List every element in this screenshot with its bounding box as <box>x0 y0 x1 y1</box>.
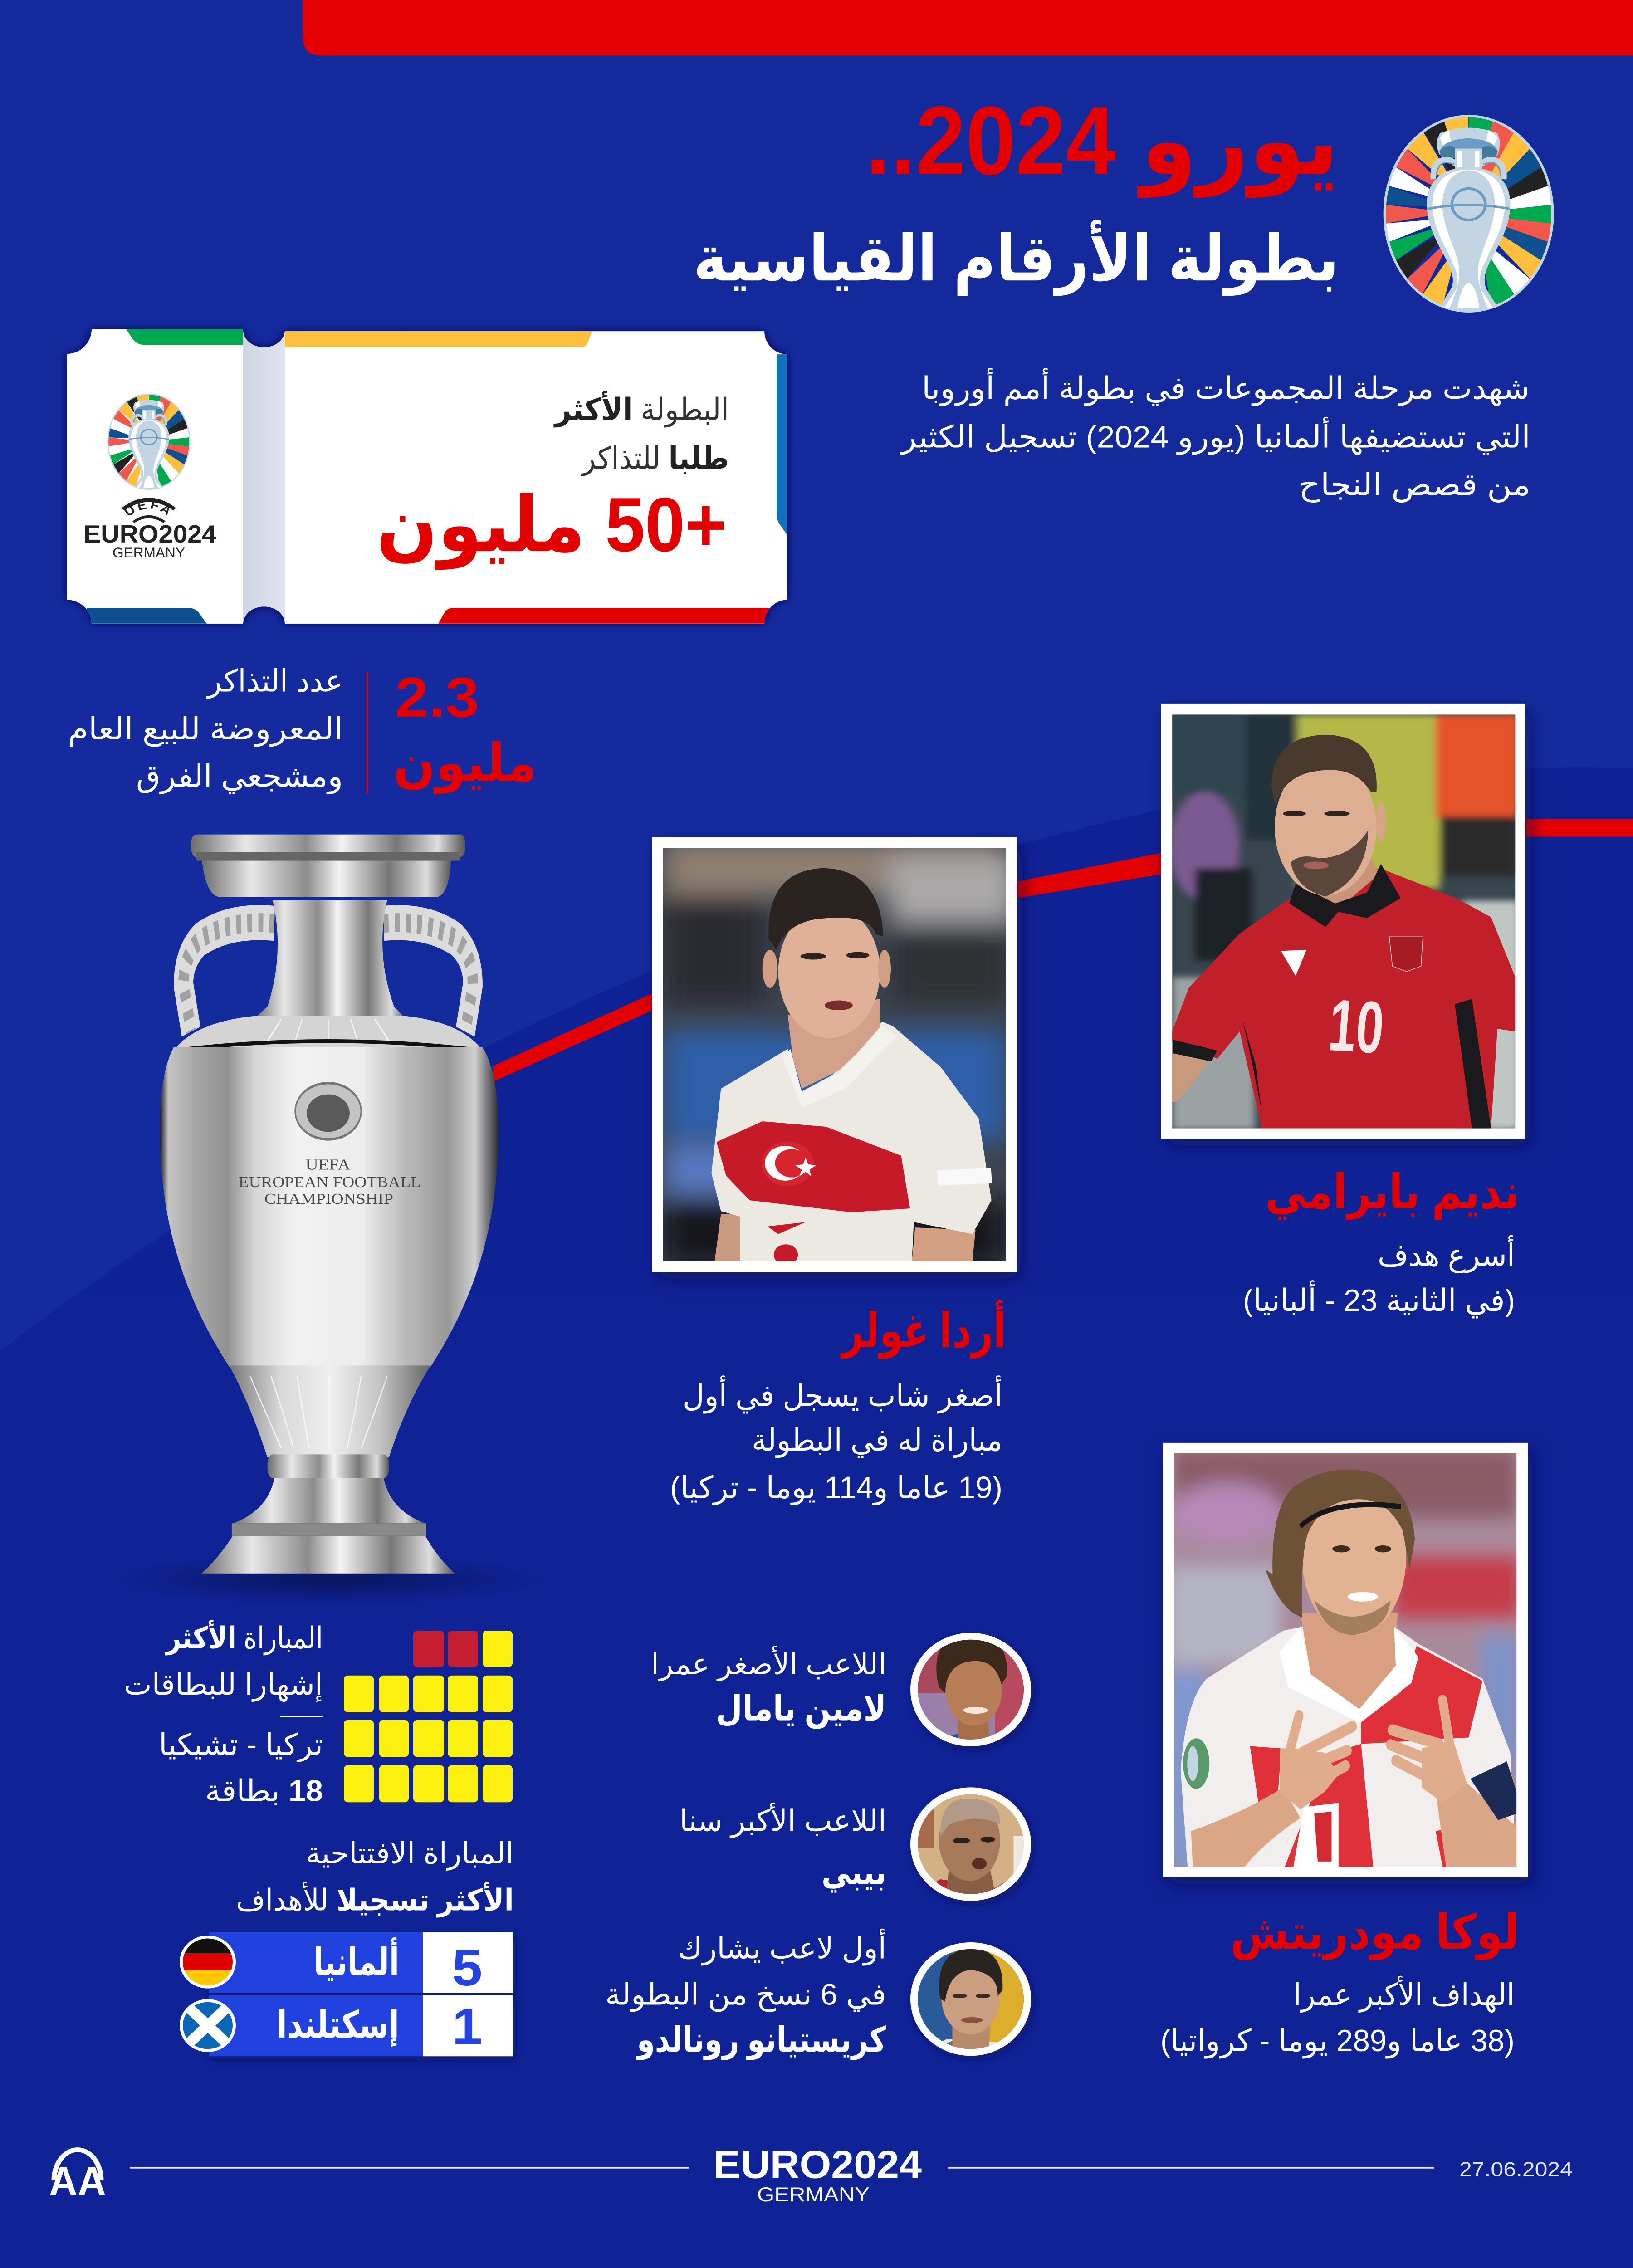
jersey <box>1172 868 1515 1129</box>
chart: card grid <box>344 1631 513 1802</box>
swoosh red connecting line <box>493 819 1633 1082</box>
arm <box>1172 1053 1211 1102</box>
date: 27.06.2024 <box>1459 2158 1573 2180</box>
jersey details <box>1281 950 1306 976</box>
arms <box>1191 1788 1301 1867</box>
head <box>1275 759 1376 895</box>
text: Pepe: اللاعب الأكبر سنا <box>680 1802 886 1838</box>
text: Ronaldo: كريستيانو رونالدو <box>636 2020 887 2060</box>
portrait: Lamine Yamal <box>897 1624 1044 1762</box>
name: Bajrami: (في الثانية 23 - ألبانيا) <box>1243 1280 1515 1319</box>
name: Modric <box>1160 1906 1519 2059</box>
number <box>1293 1803 1339 1867</box>
title <box>693 86 1339 296</box>
text: Pepe <box>680 1802 886 1892</box>
row: Scotland: إسكتلندا <box>277 2004 399 2047</box>
intro paragraph: التي تستضيفها ألمانيا (يورو 2024) تسجيل الكثير <box>900 416 1530 455</box>
stat: 2.3 million: عدد التذاكر <box>206 664 343 699</box>
text: Lamine Yamal: لامين يامال <box>716 1689 886 1729</box>
cards text: المباراة الأكثر <box>165 1620 323 1656</box>
intro paragraph: شهدت مرحلة المجموعات في بطولة أمم أوروبا <box>922 368 1530 406</box>
row: Germany <box>313 1937 482 1996</box>
shirt <box>1181 1627 1516 1867</box>
portrait: Pepe <box>897 1779 1044 1916</box>
shoulder <box>174 1016 483 1051</box>
name: Bajrami: نديم بايرامي <box>1265 1166 1520 1220</box>
footer rule left <box>130 2167 689 2169</box>
panel: ticket <box>67 324 787 627</box>
neck <box>1297 858 1378 904</box>
row: Scotland <box>277 1998 482 2055</box>
name: Guler <box>670 1300 1006 1506</box>
stat: 2.3 million <box>68 664 537 795</box>
red band <box>717 1121 910 1212</box>
body <box>160 1047 499 1367</box>
ticket number: +50 مليون <box>376 482 727 570</box>
name: Modric: لوكا مودريتش <box>1230 1906 1519 1960</box>
handles <box>183 923 274 1031</box>
shirt collar <box>782 1025 896 1108</box>
logo: euro 2024 footer: GERMANY <box>757 2183 870 2206</box>
trophy <box>116 835 542 1605</box>
cards text: تركيا - تشيكيا <box>159 1728 323 1762</box>
shirt <box>711 1022 992 1261</box>
text: Pepe: بيبي <box>821 1853 886 1892</box>
opening match text: الأكثر تسجيلا للأهداف <box>236 1882 514 1918</box>
intro paragraph <box>900 368 1530 503</box>
neck <box>254 900 406 1019</box>
cards text: إشهارا للبطاقات <box>124 1668 323 1702</box>
text: Ronaldo <box>605 1929 887 2060</box>
name: Modric: الهداف الأكبر عمرا <box>1293 1975 1515 2013</box>
flag: Scotland <box>180 1999 236 2052</box>
stat: 2.3 million: ومشجعي الفرق <box>136 759 343 795</box>
ticket wordmark: UEFA <box>122 498 176 519</box>
name: Guler: مباراة له في البطولة <box>752 1423 1002 1458</box>
name: Guler: أصغر شاب يسجل في أول <box>683 1375 1002 1414</box>
name: Bajrami: أسرع هدف <box>1378 1235 1515 1273</box>
opening match text <box>236 1837 514 1918</box>
portrait: Ronaldo <box>897 1932 1044 2071</box>
stat: 2.3 million: المعروضة للبيع العام <box>68 712 343 747</box>
row: Germany: ألمانيا <box>313 1937 399 1983</box>
arms <box>714 1214 742 1261</box>
trophy inscription: UEFA <box>306 1156 351 1173</box>
ticket logo <box>103 391 196 491</box>
flag: Germany <box>180 1936 236 1989</box>
armband <box>1471 1761 1516 1820</box>
logo: euro 2024 footer <box>714 2142 922 2206</box>
lower body <box>229 1365 430 1457</box>
ticket wordmark <box>83 498 216 561</box>
collar <box>1289 864 1401 927</box>
head <box>1302 1478 1406 1635</box>
top red bar <box>303 0 1633 55</box>
head <box>778 905 880 1038</box>
logo: AA: AA <box>49 2159 106 2204</box>
name: Guler: (19 عاما و114 يوما - تركيا) <box>670 1470 1002 1506</box>
cup <box>201 856 451 897</box>
row: Scotland: 1 <box>452 1998 482 2055</box>
panel: ticket: طلبا للتذاكر <box>581 441 729 476</box>
row: Germany: 5 <box>452 1939 482 1996</box>
cards text: 18 بطاقة <box>205 1774 323 1808</box>
intro paragraph: من قصص النجاح <box>1299 468 1530 503</box>
emblem <box>295 1083 361 1139</box>
footer rule right <box>948 2167 1434 2169</box>
text: Ronaldo: في 6 نسخ من البطولة <box>605 1978 886 2012</box>
photo: Arda Guler <box>652 837 1017 1272</box>
text: Lamine Yamal: اللاعب الأصغر عمرا <box>651 1646 886 1681</box>
trophy inscription: EUROPEAN FOOTBALL <box>239 1173 421 1191</box>
trophy inscription: CHAMPIONSHIP <box>264 1190 393 1207</box>
text: Lamine Yamal <box>651 1646 886 1729</box>
score table <box>180 1932 513 2056</box>
photo: Luka Modric <box>1163 1443 1528 1877</box>
photo: Nedim Bajrami <box>1161 704 1525 1139</box>
opening match text: المباراة الافتتاحية <box>306 1837 514 1871</box>
cards text <box>124 1620 323 1808</box>
foot <box>268 1454 389 1478</box>
name: Bajrami <box>1243 1166 1520 1319</box>
title line one: يورو 2024.. <box>865 86 1339 198</box>
photo: Nedim Bajrami: 10 <box>1325 984 1387 1069</box>
text: Ronaldo: أول لاعب يشارك <box>678 1929 886 1966</box>
logo: euro 2024 emblem <box>1373 109 1564 316</box>
ticket wordmark: EURO2024 <box>83 520 216 548</box>
neck <box>1301 1613 1398 1709</box>
name: Modric: (38 عاما و289 يوما - كرواتيا) <box>1160 2024 1515 2059</box>
stat: 2.3 million: 2.3 <box>395 666 479 729</box>
title line two: بطولة الأرقام القياسية <box>693 220 1339 296</box>
right hand <box>1391 1701 1467 1803</box>
stat: 2.3 million: مليون <box>393 733 537 794</box>
ticket wordmark: GERMANY <box>112 545 185 561</box>
logo: euro 2024 footer: EURO2024 <box>714 2142 922 2186</box>
ticket text: البطولة الأكثر <box>553 391 729 428</box>
neck <box>788 999 880 1089</box>
name: Guler: أردا غولر <box>840 1300 1006 1359</box>
trophy inscription <box>239 1156 421 1207</box>
left hand <box>1280 1716 1352 1809</box>
